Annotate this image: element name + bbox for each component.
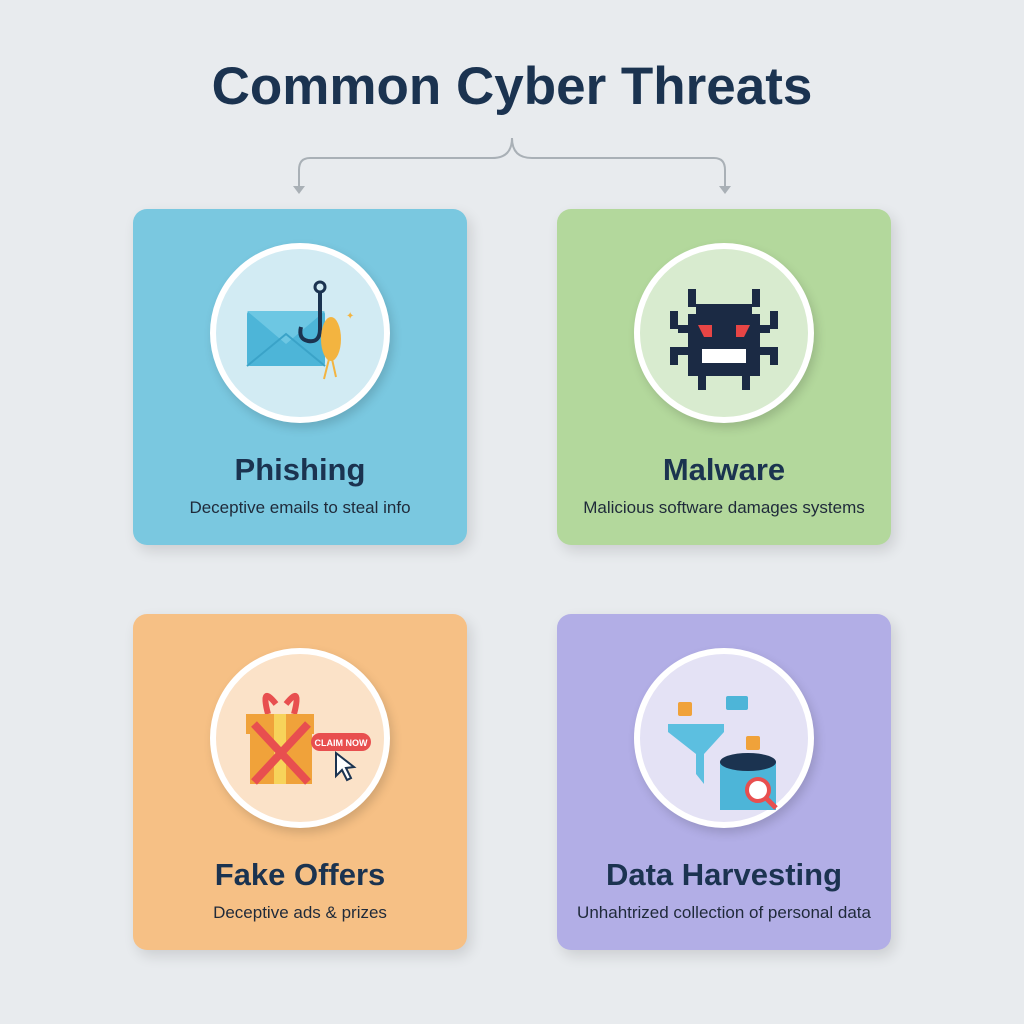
icon: pixel bug — [634, 243, 814, 423]
panel: phishing — [133, 209, 467, 545]
description: Malicious software damages systems — [583, 498, 865, 517]
description: Deceptive emails to steal info — [189, 498, 411, 517]
icon: gift with claim now: CLAIM NOW — [314, 738, 368, 748]
icon: funnel and database — [634, 648, 814, 828]
heading: Fake Offers — [215, 857, 385, 892]
panel: fake offers — [133, 614, 467, 950]
icon: gift with claim now — [210, 648, 390, 828]
title: Common Cyber Threats — [212, 57, 812, 116]
arrow: bracket connector — [293, 138, 731, 194]
panel: malware — [557, 209, 891, 545]
icon: email with hook — [210, 243, 390, 423]
heading: Malware — [663, 452, 785, 487]
description: Unhahtrized collection of personal data — [577, 903, 871, 922]
heading: Phishing — [235, 452, 365, 487]
description: Deceptive ads & prizes — [213, 903, 387, 922]
heading: Data Harvesting — [606, 857, 842, 892]
icon: email with hook: ✦ — [346, 311, 354, 322]
panel: data harvesting — [557, 614, 891, 950]
